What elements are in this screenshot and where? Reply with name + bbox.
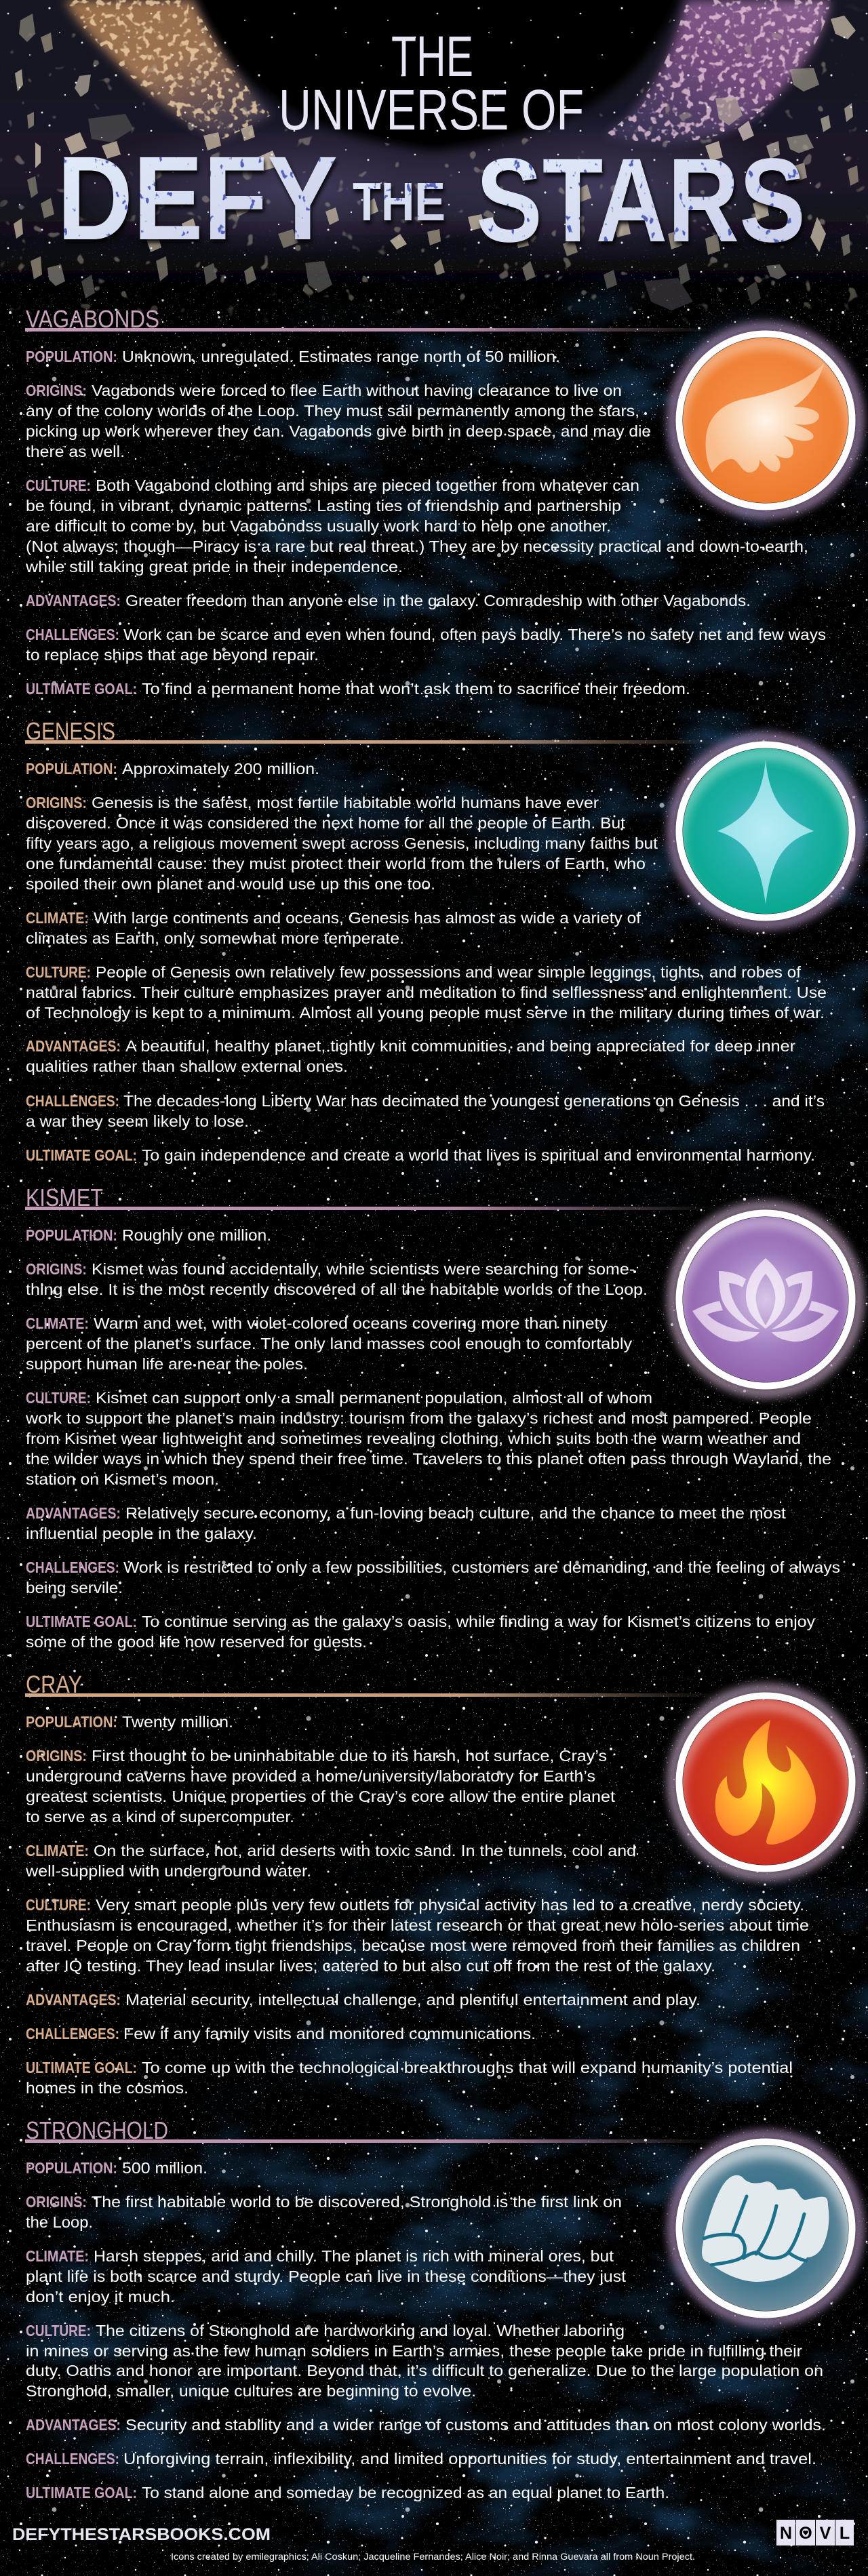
challenges: Work is restricted to only a few possibilities, customers are demanding, and the feeling of always: [123, 1558, 840, 1576]
ultimate goal: homes in the cosmos.: [26, 2079, 189, 2097]
icon: orange planet with wing: [673, 327, 859, 517]
climate: plant life is both scarce and sturdy. People can live in these conditions—they just: [26, 2268, 627, 2285]
advantages: Security and stability and a wider range of customs and attitudes than on most colony worlds.: [125, 2416, 826, 2434]
ultimate goal: To gain independence and create a world that lives is spiritual and environmental harmony.: [142, 1146, 815, 1164]
culture: be found, in vibrant, dynamic patterns. Lasting ties of friendship and partnership: [26, 497, 621, 515]
origins: Genesis is the safest, most fertile habitable world humans have ever: [92, 794, 599, 811]
origins: [26, 1260, 648, 1298]
culture: after IQ testing. They lead insular lives; catered to but also cut off from the rest of the galaxy.: [26, 1957, 715, 1975]
origins: picking up work wherever they can. Vagabonds give birth in deep space, and may die: [26, 422, 651, 440]
origins: Vagabonds were forced to flee Earth without having clearance to live on: [92, 382, 622, 399]
climate: percent of the planet’s surface. The only land masses cool enough to comfortably: [26, 1335, 633, 1352]
climate: support human life are near the poles.: [26, 1355, 308, 1373]
culture: The citizens of Stronghold are hardworking and loyal. Whether laboring: [96, 2322, 625, 2339]
challenges: CHALLENGES:: [26, 1558, 119, 1576]
culture: Stronghold, smaller, unique cultures are beginning to evolve.: [26, 2382, 476, 2400]
origins: the Loop.: [26, 2213, 93, 2231]
origins: [26, 382, 651, 460]
challenges: CHALLENGES:: [26, 626, 119, 643]
advantages: [26, 1504, 787, 1542]
population: 500 million.: [122, 2159, 208, 2177]
challenges: CHALLENGES:: [26, 2025, 119, 2042]
climate: CLIMATE:: [26, 1842, 89, 1859]
ultimate goal: ULTIMATE GOAL:: [26, 680, 137, 698]
culture: in mines or serving as the few human soldiers in Earth’s armies, these people take pride in fulfilling their: [26, 2342, 802, 2360]
advantages: ADVANTAGES:: [26, 592, 121, 609]
origins: [26, 794, 658, 893]
heading: Genesis: GENESIS: [26, 717, 115, 745]
origins: any of the colony worlds of the Loop. They must sail permanently among the stars,: [26, 402, 639, 420]
advantages: influential people in the galaxy.: [26, 1525, 257, 1542]
advantages: A beautiful, healthy planet, tightly knit communities, and being appreciated for deep inner: [125, 1037, 795, 1055]
climate: [26, 2247, 627, 2306]
origins: there as well.: [26, 443, 125, 460]
ultimate goal: To stand alone and someday be recognized as an equal planet to Earth.: [142, 2484, 669, 2501]
challenges: a war they seem likely to lose.: [26, 1112, 249, 1130]
climate: don’t enjoy it much.: [26, 2288, 175, 2306]
population: POPULATION:: [26, 2159, 117, 2177]
origins: First thought to be uninhabitable due to its harsh, hot surface, Cray’s: [92, 1747, 607, 1765]
culture: from Kismet wear lightweight and sometimes revealing clothing, which suits both the warm weather and: [26, 1430, 801, 1447]
advantages: qualities rather than shallow external ones.: [26, 1058, 348, 1075]
population: POPULATION:: [26, 1713, 117, 1731]
ultimate goal: ULTIMATE GOAL:: [26, 1146, 137, 1164]
climate: Harsh steppes, arid and chilly. The planet is rich with mineral ores, but: [94, 2247, 614, 2265]
origins: underground caverns have provided a home/university/laboratory for Earth’s: [26, 1767, 595, 1785]
population: POPULATION:: [26, 760, 117, 778]
climate: [25, 1842, 636, 1880]
logo: NOVL: [776, 2520, 854, 2545]
culture: Both Vagabond clothing and ships are pieced together from whatever can: [96, 477, 639, 494]
ultimate goal: To find a permanent home that won’t ask them to sacrifice their freedom.: [142, 680, 690, 698]
population: POPULATION:: [26, 1226, 117, 1244]
challenges: Unforgiving terrain, inflexibility, and limited opportunities for study, entertainment and travel.: [123, 2450, 816, 2468]
advantages: Greater freedom than anyone else in the galaxy. Comradeship with other Vagabonds.: [125, 592, 751, 609]
culture: People of Genesis own relatively few possessions and wear simple leggings, tights, and robes of: [96, 963, 802, 981]
culture: station on Kismet’s moon.: [26, 1470, 219, 1488]
advantages: [26, 1037, 795, 1075]
culture: CULTURE:: [26, 2322, 91, 2339]
culture: while still taking great pride in their independence.: [25, 558, 403, 576]
climate: CLIMATE:: [26, 2247, 89, 2265]
population: Approximately 200 million.: [122, 760, 319, 778]
ultimate goal: some of the good life now reserved for guests.: [26, 1633, 367, 1651]
title: DEFY: [57, 132, 338, 265]
population: POPULATION:: [26, 348, 117, 365]
climate: With large continents and oceans, Genesis has almost as wide a variety of: [94, 909, 642, 927]
logo: NOVL: O: [799, 2524, 812, 2543]
origins: spoiled their own planet and would use up this one too.: [26, 875, 435, 893]
population: Roughly one million.: [122, 1226, 271, 1244]
culture: CULTURE:: [26, 963, 91, 981]
culture: CULTURE:: [26, 1389, 91, 1407]
panel: Genesis: [25, 717, 859, 1164]
culture: work to support the planet’s main industry: tourism from the galaxy’s richest and most pampered. People: [25, 1409, 812, 1427]
advantages: ADVANTAGES:: [26, 1504, 121, 1522]
advantages: Relatively secure economy, a fun-loving beach culture, and the chance to meet the most: [125, 1504, 787, 1522]
advantages: Material security, intellectual challenge, and plentiful entertainment and play.: [125, 1991, 701, 2009]
origins: [26, 2193, 622, 2231]
ultimate goal: [26, 2059, 793, 2097]
origins: fifty years ago, a religious movement swept across Genesis, including many faiths but: [26, 834, 658, 852]
culture: CULTURE:: [26, 1896, 91, 1914]
logo: NOVL: L: [840, 2524, 850, 2543]
icon: teal planet with star: [673, 738, 859, 927]
panel: Cray: [25, 1670, 859, 2097]
population: Unknown, unregulated. Estimates range north of 50 million.: [122, 348, 560, 365]
climate: CLIMATE:: [26, 909, 89, 927]
challenges: being servile.: [26, 1579, 123, 1596]
population: [26, 2159, 208, 2177]
culture: (Not always, though—Piracy is a rare but real threat.) They are by necessity practical and down-to-earth,: [26, 538, 808, 555]
culture: [25, 1389, 831, 1488]
title: [57, 24, 806, 267]
culture: Very smart people plus very few outlets for physical activity has led to a creative, nerdy society.: [96, 1896, 804, 1914]
icon: slate planet with fist: [673, 2135, 859, 2325]
challenges: [26, 1558, 840, 1596]
origins: to serve as a kind of supercomputer.: [26, 1808, 294, 1826]
population: Twenty million.: [122, 1713, 233, 1731]
culture: CULTURE:: [26, 477, 91, 494]
climate: [26, 909, 642, 947]
footer: website: DEFYTHESTARSBOOKS.COM: [12, 2525, 271, 2544]
origins: ORIGINS:: [26, 382, 87, 399]
culture: the wilder ways in which they spend their free time. Travelers to this planet often pass through Wayland, the: [26, 1450, 831, 1468]
logo: NOVL: V: [820, 2524, 831, 2543]
heading: Vagabonds: VAGABONDS: [26, 305, 159, 333]
culture: [25, 477, 808, 576]
challenges: CHALLENGES:: [26, 1092, 119, 1110]
challenges: to replace ships that age beyond repair.: [26, 646, 319, 664]
origins: thing else. It is the most recently discovered of all the habitable worlds of the Loop.: [26, 1281, 648, 1298]
advantages: ADVANTAGES:: [26, 1991, 121, 2009]
culture: [26, 2322, 823, 2400]
icon: red planet with flame: [673, 1689, 859, 1878]
heading: Kismet: KISMET: [26, 1184, 103, 1211]
challenges: [26, 626, 826, 664]
header artwork: shattering structure: [0, 0, 868, 325]
climate: CLIMATE:: [26, 1314, 89, 1332]
heading: Stronghold: STRONGHOLD: [26, 2116, 168, 2144]
culture: of Technology is kept to a minimum. Almost all young people must serve in the military during times of war.: [26, 1004, 825, 1022]
population: [26, 1713, 233, 1731]
climate: well-supplied with underground water.: [25, 1862, 311, 1880]
ultimate goal: ULTIMATE GOAL:: [26, 1613, 137, 1630]
title: STARS: [476, 134, 806, 267]
origins: discovered. Once it was considered the next home for all the people of Earth. But: [26, 814, 626, 832]
ultimate goal: ULTIMATE GOAL:: [26, 2484, 137, 2501]
logo: NOVL: N: [780, 2524, 792, 2543]
challenges: [26, 1092, 825, 1130]
ultimate goal: [26, 1613, 816, 1651]
ultimate goal: ULTIMATE GOAL:: [26, 2059, 137, 2076]
origins: [26, 1747, 616, 1826]
icon: violet planet with lotus: [673, 1207, 859, 1396]
climate: Warm and wet, with violet-colored oceans covering more than ninety: [94, 1314, 608, 1332]
challenges: Few if any family visits and monitored communications.: [123, 2025, 536, 2042]
origins: ORIGINS:: [26, 1747, 87, 1765]
panel: Kismet: [25, 1184, 859, 1651]
climate: On the surface, hot, arid deserts with toxic sand. In the tunnels, cool and: [94, 1842, 636, 1859]
culture: Kismet can support only a small permanent population, almost all of whom: [96, 1389, 652, 1407]
challenges: CHALLENGES:: [26, 2450, 119, 2468]
origins: ORIGINS:: [26, 1260, 87, 1278]
challenges: The decades-long Liberty War has decimated the youngest generations on Genesis . . . and it’s: [123, 1092, 825, 1110]
climate: [26, 1314, 633, 1373]
origins: Kismet was found accidentally, while scientists were searching for some-: [92, 1260, 635, 1278]
culture: travel. People on Cray form tight friendships, because most were removed from their families as children: [26, 1937, 800, 1954]
advantages: ADVANTAGES:: [26, 1037, 121, 1055]
title: UNIVERSE OF: [279, 78, 584, 142]
challenges: Work can be scarce and even when found, often pays badly. There’s no safety net and few ways: [123, 626, 826, 643]
origins: greatest scientists. Unique properties of the Cray’s core allow the entire planet: [26, 1788, 616, 1805]
population: [26, 1226, 271, 1244]
heading: Cray: CRAY: [26, 1670, 82, 1698]
culture: [26, 1896, 809, 1975]
population: [26, 760, 319, 778]
advantages: ADVANTAGES:: [26, 2416, 121, 2434]
culture: duty. Oaths and honor are important. Beyond that, it’s difficult to generalize. Due to the large population on: [26, 2362, 823, 2379]
origins: one fundamental cause: they must protect their world from the rulers of Earth, who: [26, 855, 646, 872]
panel: Stronghold: [25, 2116, 859, 2501]
credits: Icons created by emilegraphics; Ali Coskun; Jacqueline Fernandes; Alice Noir; and Rinna Guevara all from Noun Project.: [171, 2551, 695, 2562]
origins: ORIGINS:: [26, 2193, 87, 2211]
culture: are difficult to come by, but Vagabondss usually work hard to help one another.: [26, 517, 611, 535]
panel: Vagabonds: [25, 305, 859, 698]
title: THE: [391, 24, 473, 88]
culture: [26, 963, 827, 1022]
climate: climates as Earth, only somewhat more temperate.: [26, 929, 404, 947]
ultimate goal: To continue serving as the galaxy’s oasis, while finding a way for Kismet’s citizens to enjoy: [142, 1613, 816, 1630]
culture: natural fabrics. Their culture emphasizes prayer and meditation to find selflessness and enlightenment. Use: [26, 984, 827, 1001]
culture: Enthusiasm is encouraged, whether it’s for their latest research or that great new holo-series about time: [26, 1916, 809, 1934]
origins: The first habitable world to be discovered, Stronghold is the first link on: [92, 2193, 622, 2211]
title: THE: [353, 172, 446, 232]
origins: ORIGINS:: [26, 794, 87, 811]
ultimate goal: To come up with the technological breakthroughs that will expand humanity’s potential: [142, 2059, 793, 2076]
